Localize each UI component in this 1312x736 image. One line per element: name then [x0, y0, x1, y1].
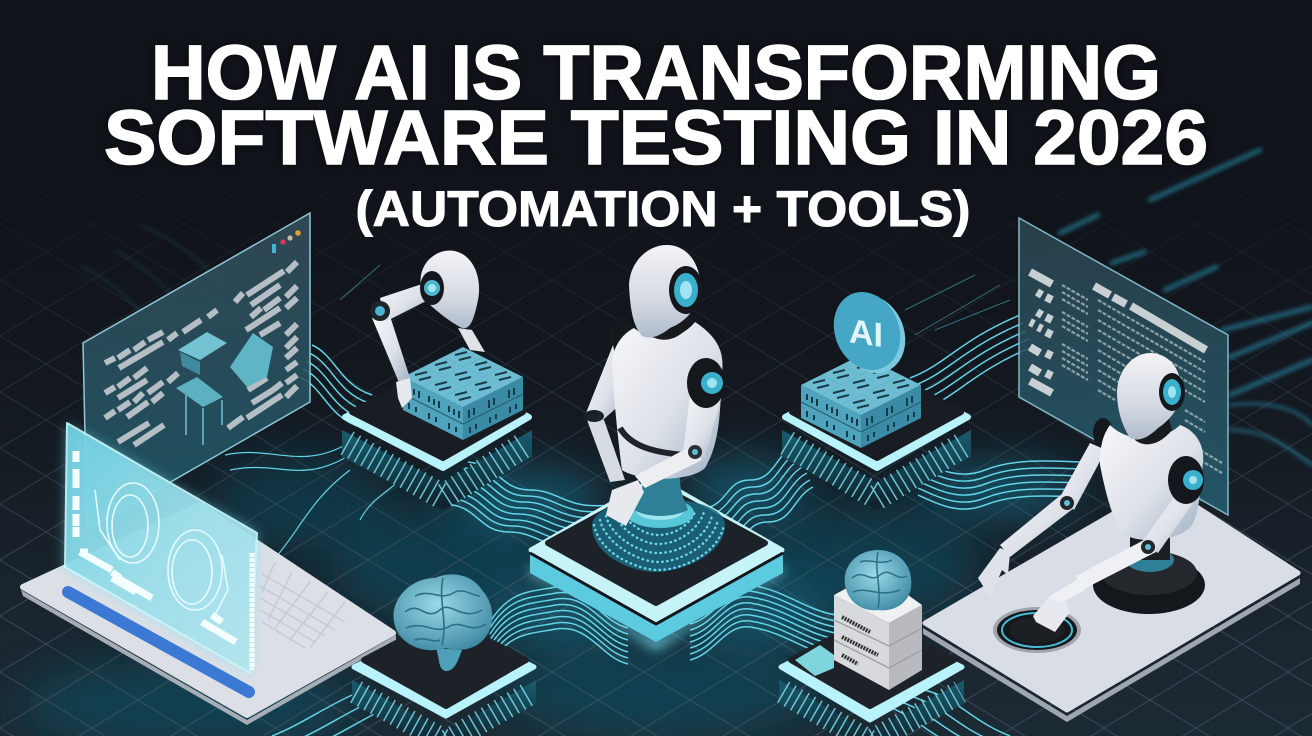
- code blocks right screen: [1030, 272, 1052, 393]
- right robot hand: [1033, 598, 1070, 632]
- panel: bottom-right server platform: [779, 550, 964, 736]
- right robot head: [1117, 353, 1181, 440]
- icon: window controls: [272, 230, 301, 253]
- background glows: [20, 450, 980, 736]
- text lines right screen: [1062, 285, 1222, 473]
- icon: AI disc: [822, 282, 917, 383]
- title line 2: SOFTWARE TESTING IN 2026: [104, 95, 1208, 181]
- panel: centre platform: [530, 478, 783, 650]
- panel: top-right cube platform: [782, 282, 971, 510]
- code bars left screen: [105, 262, 297, 445]
- title: [102, 30, 1210, 237]
- centre robot head: [629, 245, 700, 338]
- cube stack: [801, 355, 921, 448]
- robot base: [1093, 535, 1205, 614]
- laptop keyboard: [260, 562, 345, 648]
- icon: AI disc: AI: [849, 312, 883, 355]
- icon: machine hologram: [176, 332, 273, 445]
- title: SOFTWARE TESTING IN 2026: [102, 95, 1210, 181]
- small cyan tab: [795, 645, 834, 676]
- centre robot hand: [606, 480, 644, 526]
- panel: rear-right code screen: [1019, 218, 1228, 515]
- subtitle: (AUTOMATION + TOOLS): [356, 181, 970, 237]
- right robot neck: [1135, 405, 1172, 444]
- laptop hologram screen: [65, 423, 257, 673]
- right robot near arm: [1142, 492, 1195, 553]
- icon: brain on server: [845, 550, 911, 610]
- title: HOW AI IS TRANSFORMING: [150, 30, 1162, 116]
- centre robot right arm: [683, 395, 722, 458]
- centre robot neck: [655, 300, 692, 340]
- title line 1: HOW AI IS TRANSFORMING: [151, 30, 1161, 116]
- panel: bottom-left brain platform: [352, 574, 536, 736]
- robot: top-left: [370, 251, 485, 408]
- robot: right: [978, 353, 1204, 632]
- cube stack: [403, 347, 523, 440]
- panel: rear-left code screen: [83, 213, 310, 530]
- laptop blue bar: [68, 592, 249, 692]
- pedestal: [626, 478, 694, 528]
- panel: laptop: [21, 423, 396, 725]
- wire bundles: [225, 315, 1080, 736]
- panel: top-left cube platform: [342, 347, 532, 510]
- icon: round button: [993, 607, 1081, 653]
- header bars right screen: [1094, 286, 1206, 350]
- robot: centre: [584, 245, 725, 526]
- data streams upper right: [1060, 150, 1312, 465]
- hologram dome: [592, 499, 725, 572]
- panel: right white base: [923, 485, 1300, 722]
- icon: brain: [393, 574, 492, 671]
- centre robot torso: [612, 322, 723, 479]
- dotted data lines by the AI disc: [340, 265, 1010, 335]
- right robot torso: [1100, 425, 1203, 540]
- icon: server stack: [834, 572, 922, 690]
- data streams upper left: [80, 225, 225, 310]
